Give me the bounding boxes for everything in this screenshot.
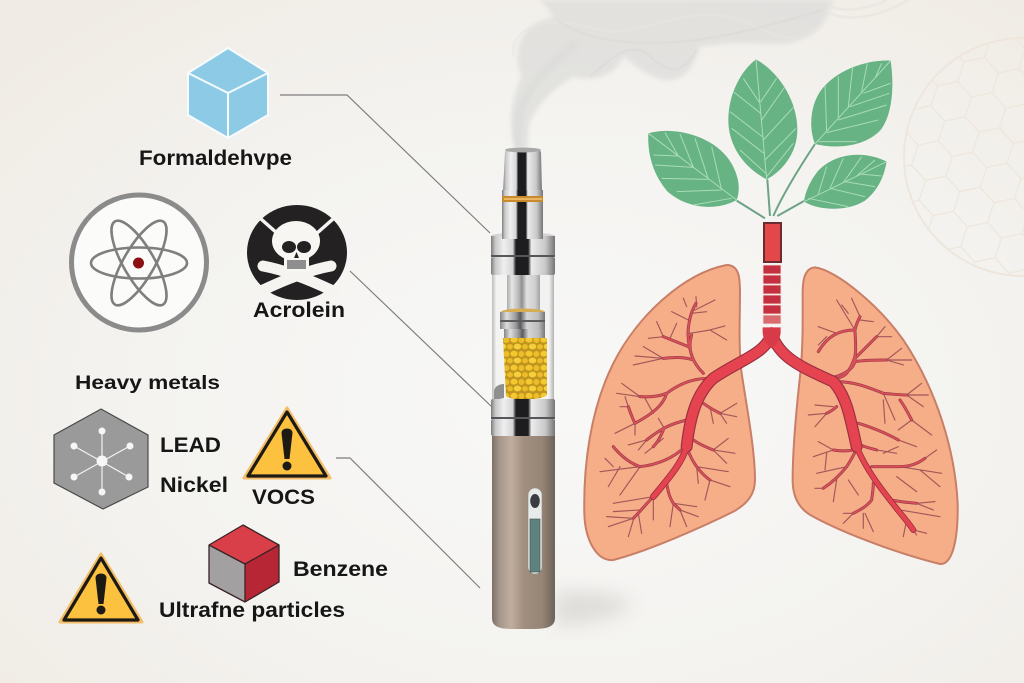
upper metal collar [491, 232, 555, 275]
lower metal collar [491, 399, 555, 436]
left lung [584, 265, 755, 560]
icon: formaldehyde blue cube [188, 48, 268, 138]
inner tube [507, 272, 540, 312]
icon: atom [72, 195, 206, 330]
mouthpiece [502, 148, 543, 239]
glass tank [492, 270, 554, 404]
heading: Heavy metals: Heavy metals [75, 372, 220, 394]
label: VOCS: VOCS [252, 486, 315, 509]
vape pen shadow [555, 590, 635, 626]
smoke plume [511, 0, 908, 148]
label: Acrolein: Acrolein [253, 299, 345, 322]
label: Ultrafine particles: Ultrafne particles [159, 599, 345, 622]
icon: VOCs warning triangle [244, 408, 330, 478]
liquid chamber [494, 308, 547, 400]
leaf: centre [728, 59, 797, 179]
leaf: lower right [804, 155, 887, 209]
leaves [648, 59, 892, 218]
label: Formaldehype: Formaldehvpe [139, 147, 292, 170]
trachea junction [763, 327, 781, 348]
bronchi outline [653, 333, 913, 530]
label: LEAD: LEAD [160, 434, 221, 457]
stems [737, 144, 815, 218]
trachea [763, 223, 781, 324]
leaf: left [648, 131, 739, 207]
lungs [584, 265, 958, 564]
twigs [600, 297, 942, 537]
icon: ultrafine particles warning triangle [60, 554, 142, 622]
control window [528, 488, 542, 574]
battery body [492, 434, 555, 629]
leader line: formaldehyde [280, 95, 490, 233]
bronchi fill [653, 333, 913, 530]
vape pen device [491, 148, 555, 629]
icon: metal hexagon [54, 409, 148, 509]
leader line: acrolein [350, 271, 492, 407]
branch outlines [613, 303, 925, 518]
label: Benzene: Benzene [293, 558, 388, 581]
leaf: right [811, 61, 892, 146]
icon: benzene red cube [209, 525, 279, 602]
hexagon sphere decoration [903, 37, 1024, 277]
branch fills [613, 303, 925, 518]
leader line: VOCs [336, 458, 480, 588]
label: Nickel: Nickel [160, 474, 228, 497]
right lung [793, 267, 958, 564]
icon: skull and crossbones [247, 205, 347, 300]
